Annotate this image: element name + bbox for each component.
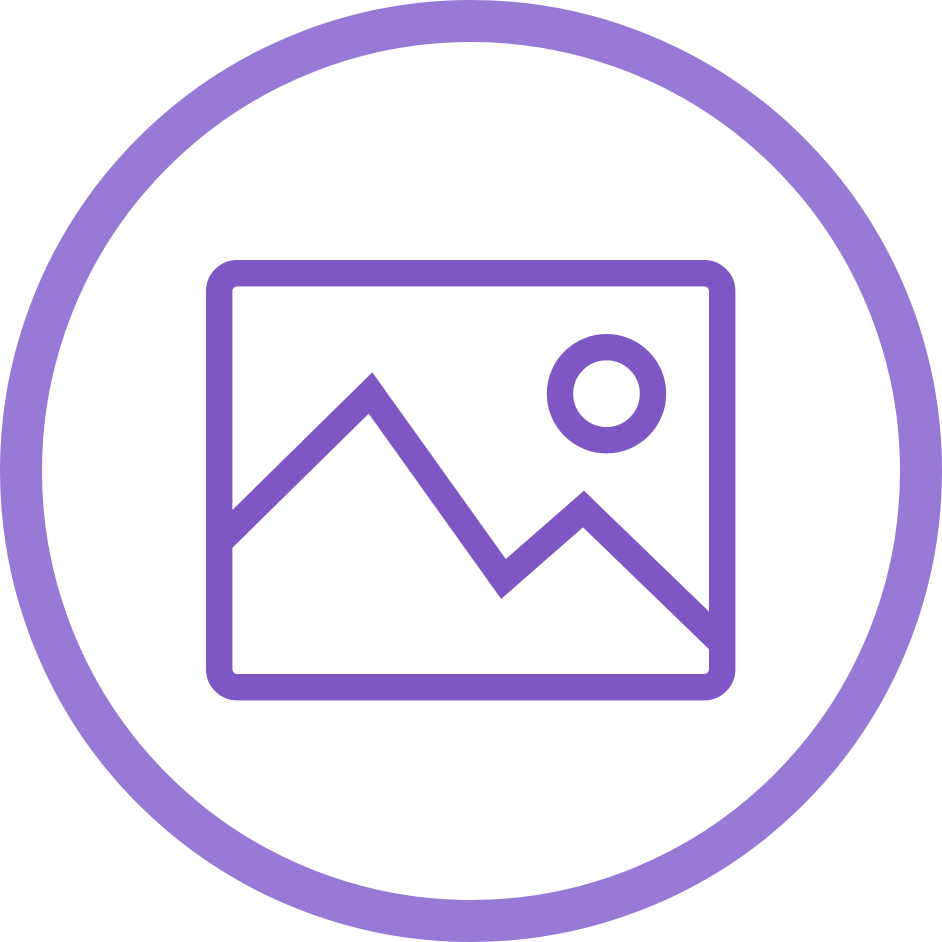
sun circle [560,347,653,440]
mountains line [216,393,722,643]
picture frame [219,273,722,687]
